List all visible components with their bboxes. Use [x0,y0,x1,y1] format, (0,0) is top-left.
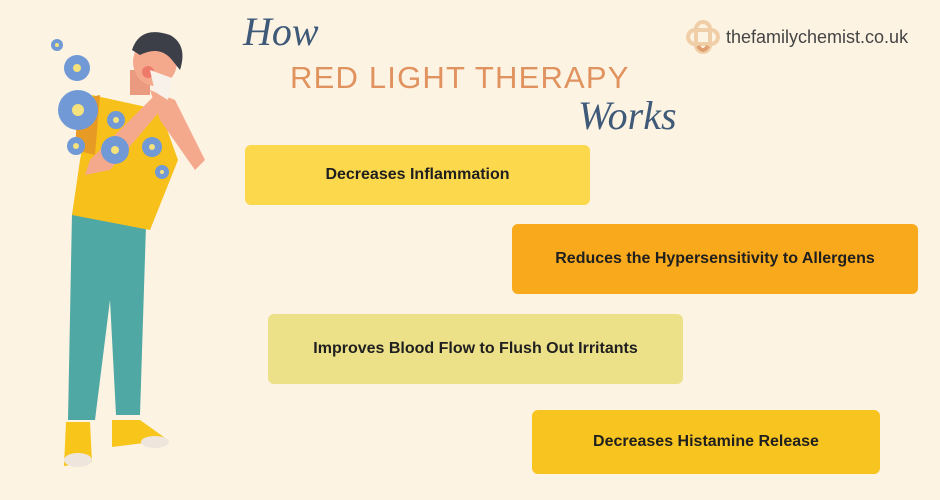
bar 2 [512,224,918,294]
bar 3 [268,314,683,384]
bar 1 [245,145,590,205]
bar 2: Reduces the Hypersensitivity to Allergens [555,250,875,267]
bar 4 [532,410,880,474]
illustration: sneezing man [51,32,205,467]
shoes [64,422,92,466]
icon: logo cross [686,20,720,54]
shirt [72,95,178,230]
bar 4: Decreases Histamine Release [593,433,819,450]
arms [150,90,205,170]
legs [68,213,146,420]
bar 3: Improves Blood Flow to Flush Out Irritants [313,340,638,357]
neck & head [130,70,150,95]
flowers [51,39,169,179]
bar 1: Decreases Inflammation [325,166,510,183]
logo: thefamilychemist.co.uk [726,26,908,46]
title: RED LIGHT THERAPY: RED LIGHT THERAPY [290,60,630,95]
title: How: How [243,9,319,54]
logo [686,20,908,54]
title: Works: Works [578,93,677,138]
